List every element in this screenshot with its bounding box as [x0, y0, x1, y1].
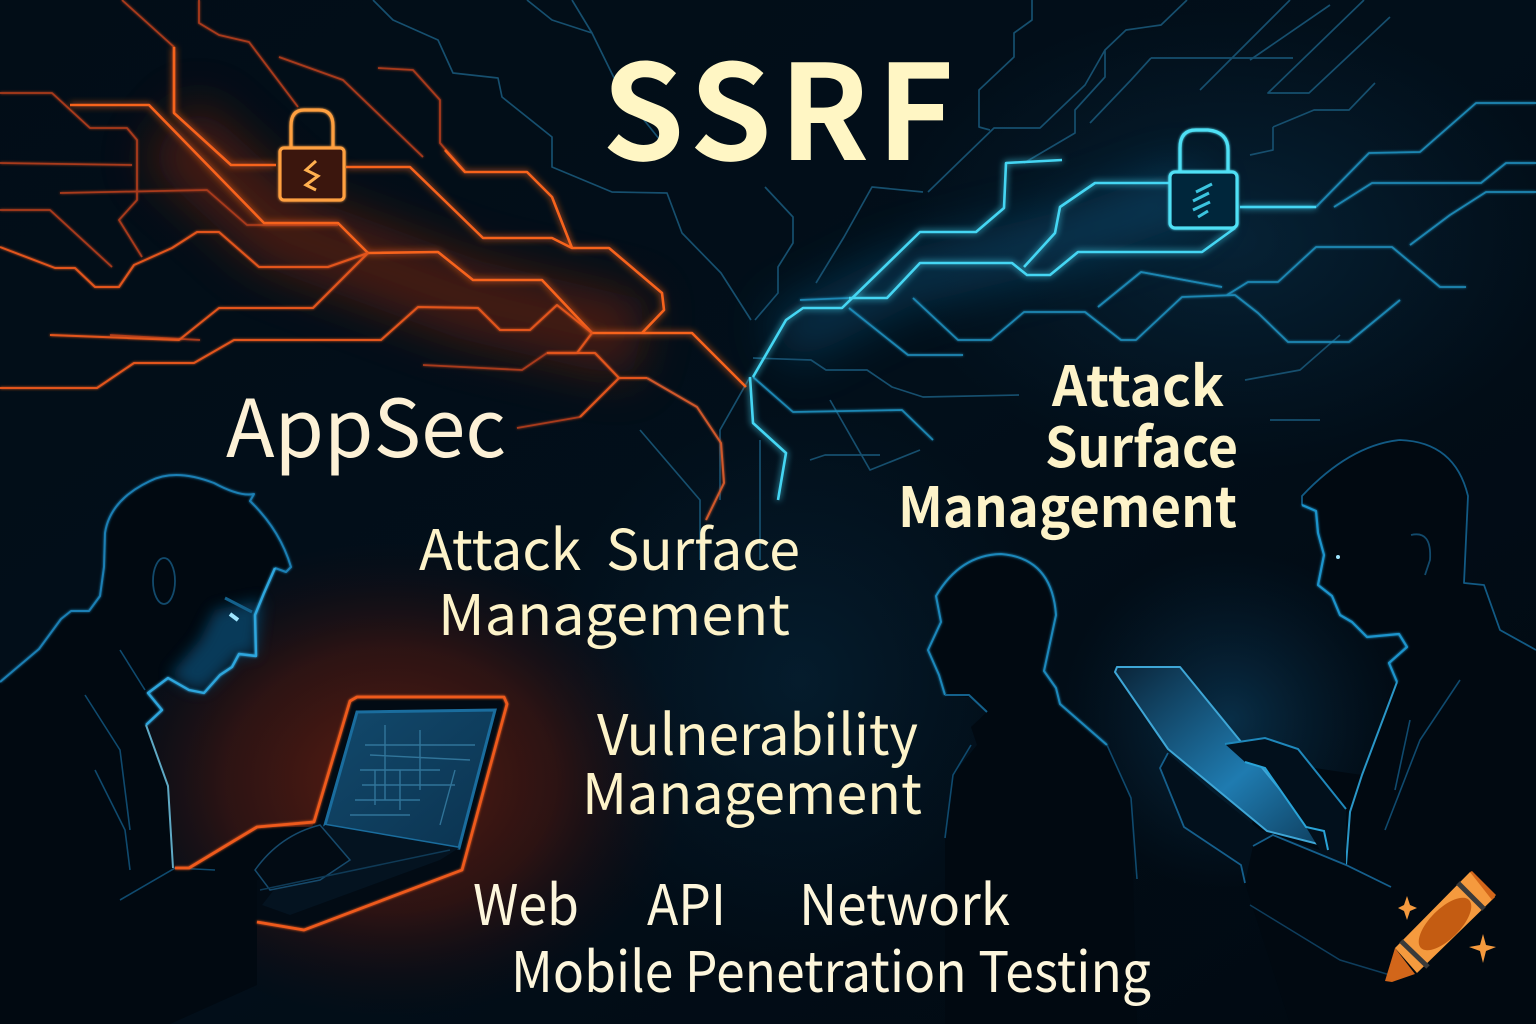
bright blue traces	[750, 160, 1316, 500]
label: Attack Surface Management (right): Attack	[1051, 342, 1224, 422]
bright orange traces	[70, 47, 746, 387]
figure: left person	[0, 475, 330, 1024]
figure: right person with tablet	[1115, 440, 1536, 1024]
label: Web API Network: Web	[473, 861, 579, 942]
label: AppSec: AppSec	[226, 365, 506, 481]
icon: crayon logo	[1385, 871, 1496, 982]
label: Attack Surface Management (right): Management	[898, 463, 1237, 543]
label: Attack Surface Management (centre): Management	[438, 571, 790, 652]
label: Attack Surface Management (right)	[898, 342, 1238, 543]
orange traces (mid brightness)	[0, 232, 724, 520]
label: Web API Network: API	[647, 861, 726, 942]
label: Web API Network: Network	[799, 861, 1010, 942]
label: Vulnerability Management	[582, 691, 922, 831]
label: Attack Surface Management (centre)	[419, 506, 800, 652]
icon: blue padlock	[1170, 130, 1237, 228]
figure: centre silhouette	[928, 554, 1137, 1024]
label: Attack Surface Management (centre): Attack Surface	[419, 506, 800, 587]
dim blue circuit lines (upper centre)	[373, 0, 1390, 560]
title: SSRF	[602, 8, 954, 199]
label: Mobile Penetration Testing: Mobile Penetration Testing	[511, 928, 1151, 1009]
icon: laptop	[175, 695, 507, 930]
label: Vulnerability Management: Vulnerability	[597, 691, 918, 772]
blue circuit traces (mid brightness)	[753, 103, 1536, 440]
label: Web API Network	[473, 861, 1010, 942]
label: Vulnerability Management: Management	[582, 750, 922, 831]
label: Attack Surface Management (right): Surface	[1045, 403, 1238, 483]
dim orange circuit traces	[0, 0, 580, 428]
icon: orange padlock	[280, 110, 344, 200]
